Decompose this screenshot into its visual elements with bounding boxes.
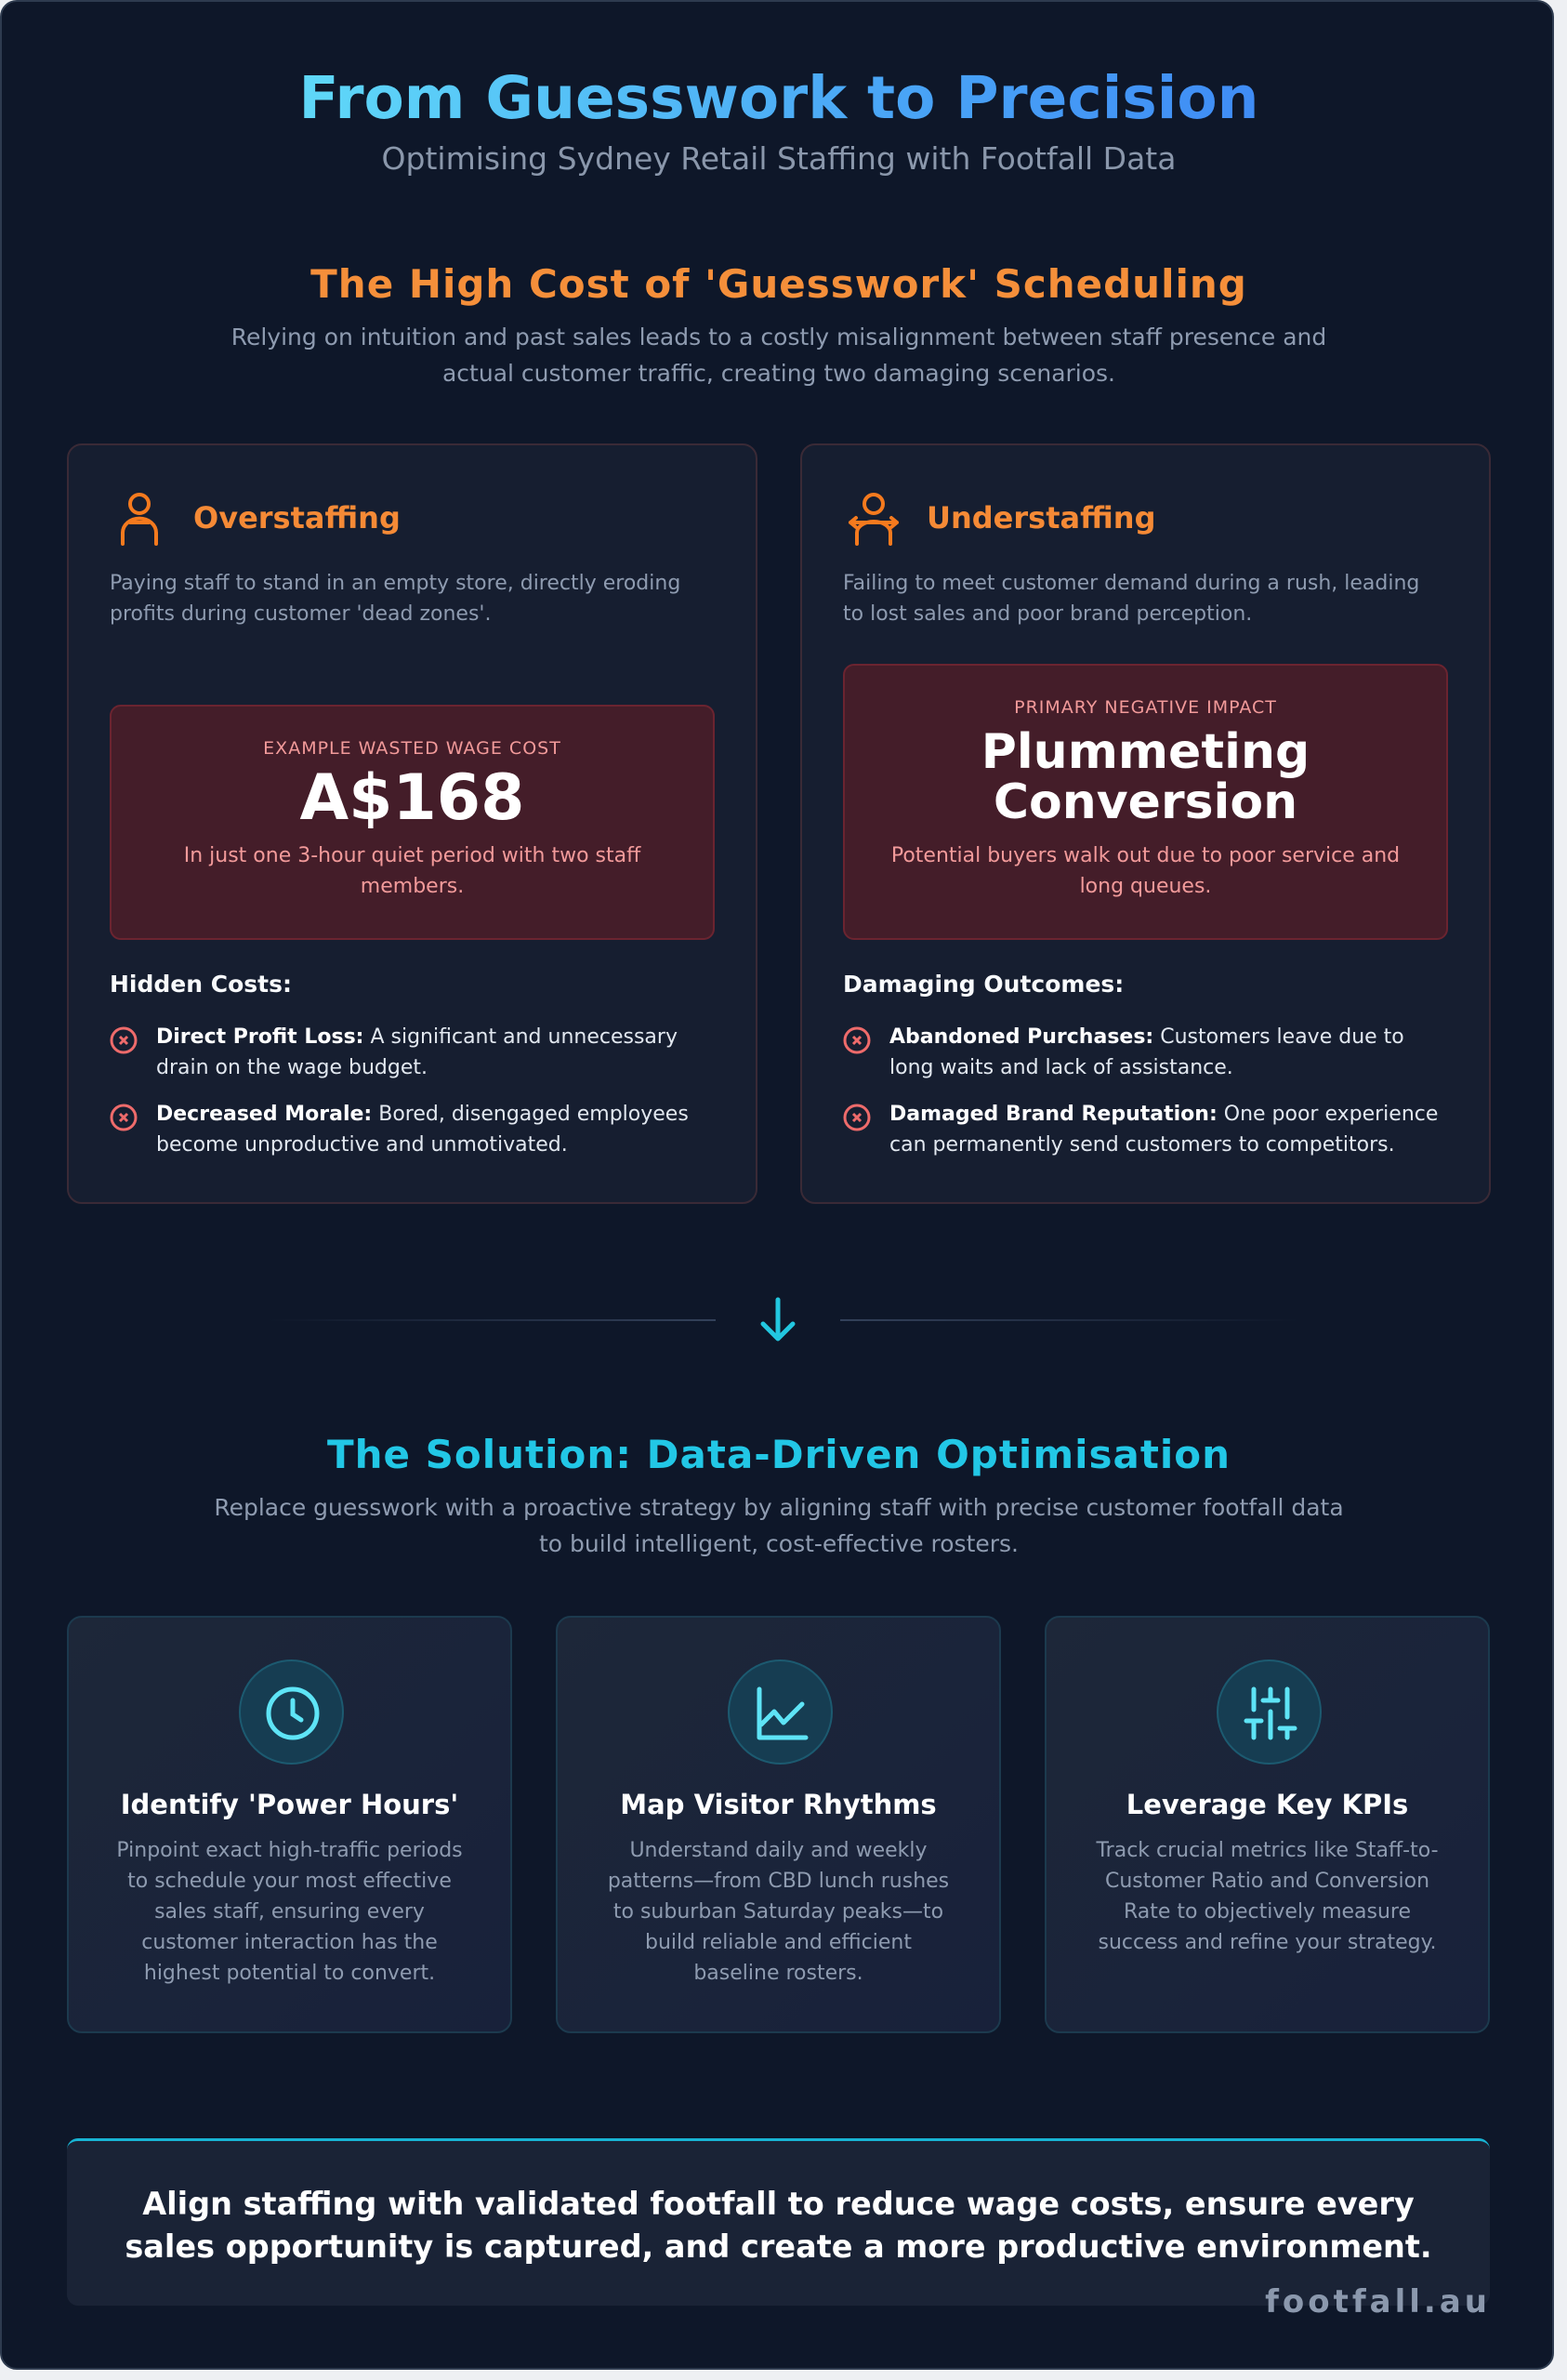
bullet 2: Damaged Brand Reputation: One poor experience can permanently send customers to competitors. (889, 1103, 1438, 1157)
callout: negative impact: PRIMARY NEGATIVE IMPACT (1014, 697, 1277, 718)
callout: wasted wage: EXAMPLE WASTED WAGE COST (263, 738, 561, 759)
conclusion box: sales opportunity is captured, and create a more productive environment. (125, 2228, 1432, 2265)
callout: wasted wage (110, 705, 715, 940)
card text: Understand daily and weekly patterns—from CBD lunch rushes to suburban Saturday peaks—to build reliable and efficient baseline rosters. (608, 1839, 949, 1985)
callout: negative impact (843, 664, 1448, 940)
panel: overstaffing (67, 443, 757, 1204)
heading: Understaffing (927, 500, 1155, 536)
card text: Track crucial metrics like Staff-to-Customer Ratio and Conversion Rate to objectively measure success and refine your strategy. (1096, 1839, 1439, 1954)
conclusion box: Align staffing with validated footfall to reduce wage costs, ensure every (142, 2186, 1415, 2222)
solution text: Replace guesswork with a proactive strategy by aligning staff with precise customer footfall data to build intelligent, cost-effective rosters. (214, 1494, 1344, 1557)
callout: negative impact: Conversion (994, 774, 1297, 830)
icon: person (121, 493, 158, 546)
bullet 2: Decreased Morale: Bored, disengaged employees become unproductive and unmotivated. (156, 1103, 689, 1157)
title: From Guesswork to Precision (298, 64, 1259, 132)
icon: sliders (1217, 1659, 1322, 1765)
card text: Pinpoint exact high-traffic periods to schedule your most effective sales staff, ensuring every customer interaction has the highest potential to convert. (116, 1839, 463, 1985)
card: visitor rhythms (556, 1616, 1001, 2033)
icon: clock (239, 1659, 344, 1765)
callout: wasted wage: A$168 (300, 761, 524, 835)
callout: negative impact: Potential buyers walk out due to poor service and long queues. (891, 844, 1400, 898)
subheading: Damaging Outcomes: (843, 971, 1124, 998)
panel: understaffing (800, 443, 1491, 1204)
subheading: Hidden Costs: (110, 971, 292, 998)
subtitle: Optimising Sydney Retail Staffing with Footfall Data (382, 140, 1176, 177)
card: power hours (67, 1616, 512, 2033)
card title: Identify 'Power Hours' (121, 1789, 458, 1820)
conclusion box (67, 2138, 1490, 2306)
bullet 1: Direct Profit Loss: A significant and unnecessary drain on the wage budget. (156, 1025, 678, 1079)
callout: negative impact: Plummeting (981, 724, 1310, 780)
icon: chart (728, 1659, 833, 1765)
heading: high cost: The High Cost of 'Guesswork' Scheduling (310, 261, 1247, 307)
brand: footfall.au: footfall.au (1265, 2283, 1491, 2320)
icon: person with arrows (848, 493, 900, 546)
arrow: down (760, 1298, 796, 1341)
description: Paying staff to stand in an empty store, directly eroding profits during customer 'dead zones'. (110, 572, 680, 626)
intro text: Relying on intuition and past sales leads to a costly misalignment between staff presence and actual customer traffic, creating two damaging scenarios. (231, 324, 1326, 387)
callout: wasted wage: In just one 3-hour quiet period with two staff members. (184, 844, 640, 898)
card title: Map Visitor Rhythms (620, 1789, 937, 1820)
card: KPIs (1045, 1616, 1490, 2033)
heading: solution: The Solution: Data-Driven Optimisation (327, 1432, 1231, 1477)
card title: Leverage Key KPIs (1126, 1789, 1408, 1820)
heading: Overstaffing (193, 500, 401, 536)
bullet 1: Abandoned Purchases: Customers leave due to long waits and lack of assistance. (889, 1025, 1404, 1079)
description: Failing to meet customer demand during a rush, leading to lost sales and poor brand perception. (843, 572, 1419, 626)
